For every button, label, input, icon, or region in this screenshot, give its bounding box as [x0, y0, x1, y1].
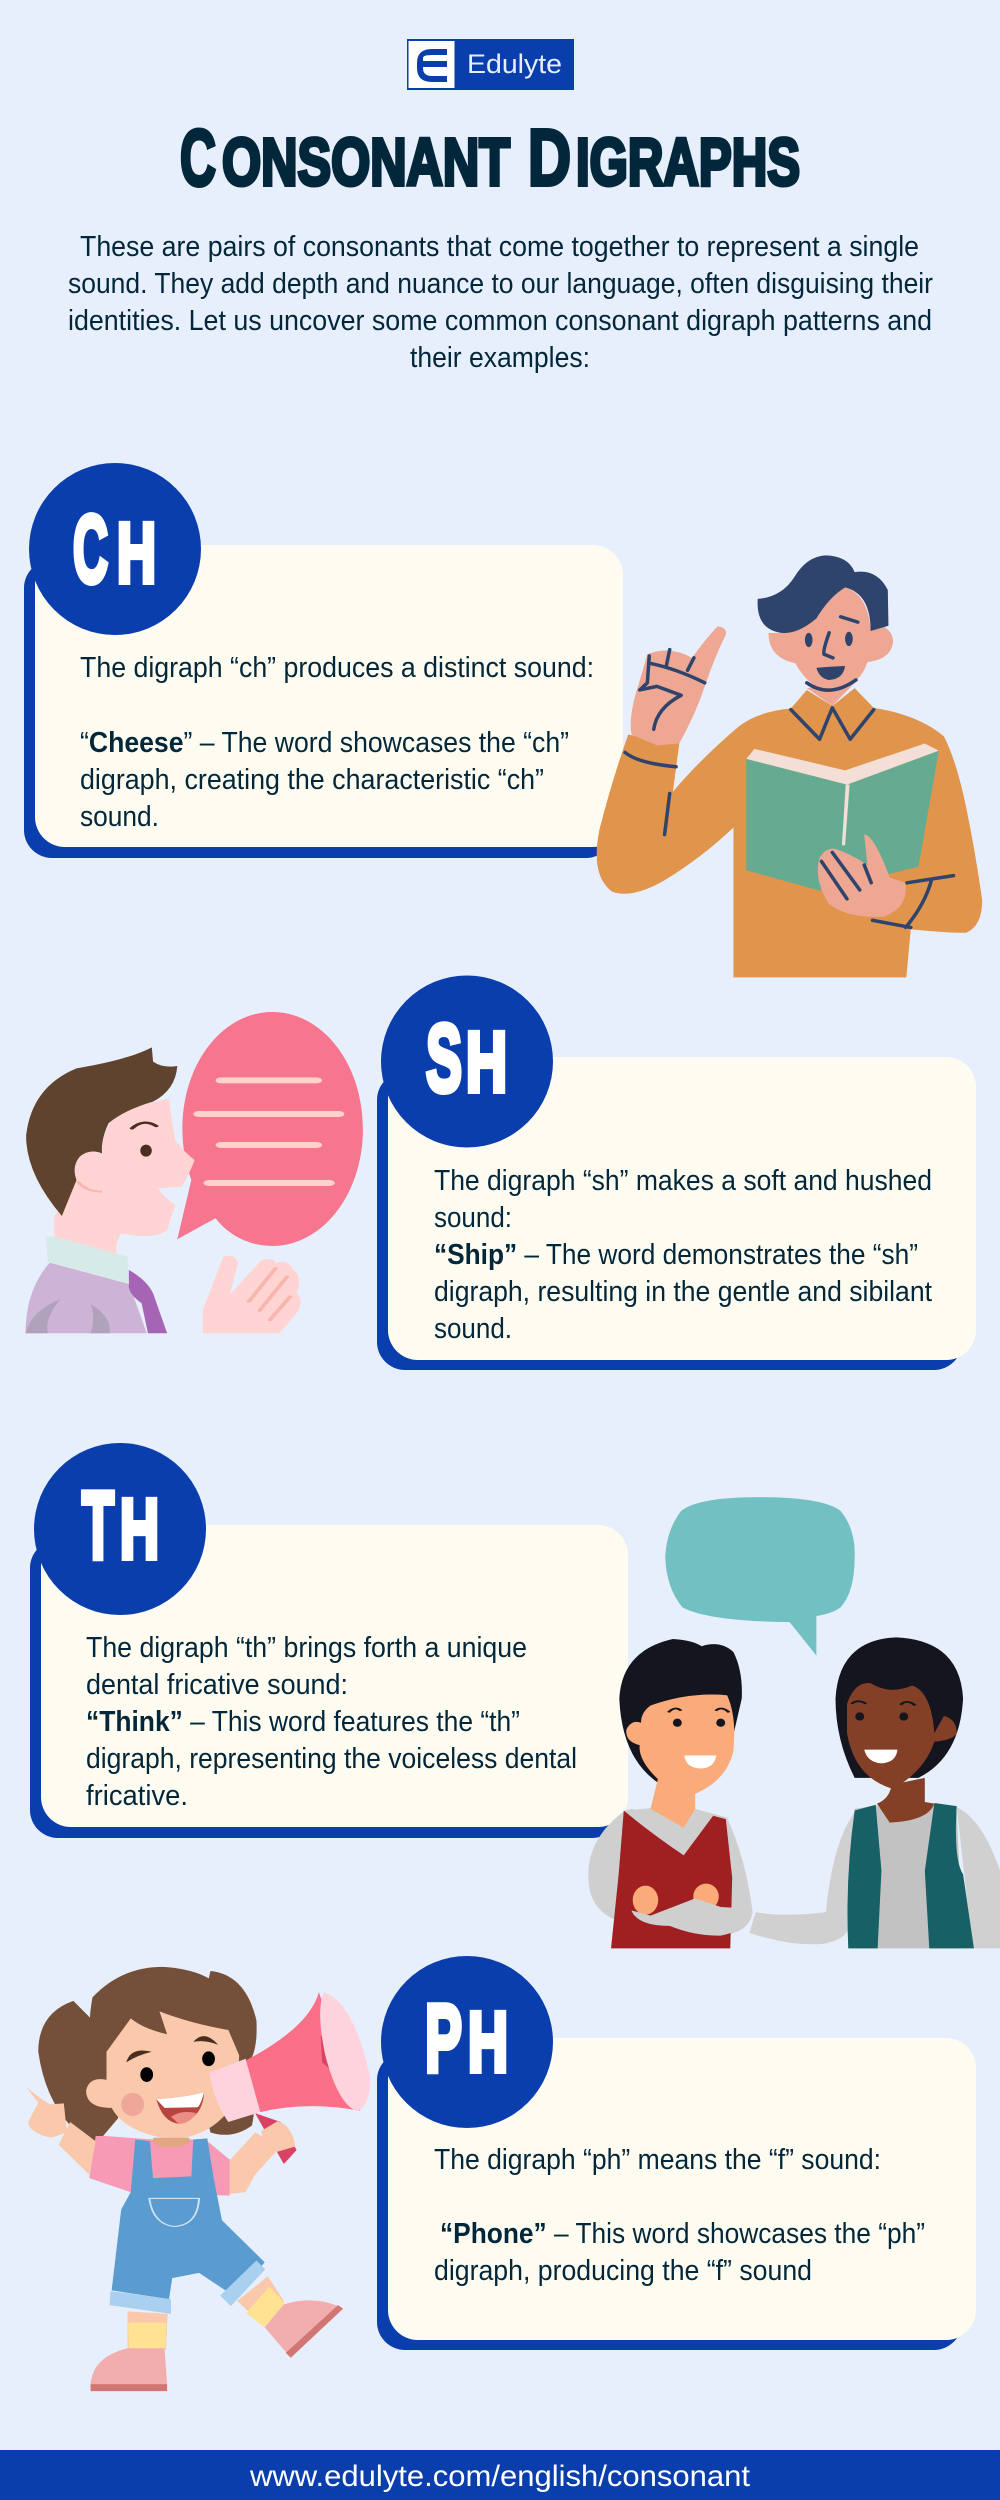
text: CH description: The digraph “ch” produces a distinct sound: — [80, 652, 594, 684]
text: SH description: The digraph “sh” makes a soft and hushed — [434, 1165, 932, 1197]
panel: SH — [377, 976, 976, 1370]
text: SH description: digraph, resulting in the gentle and sibilant — [434, 1276, 932, 1308]
badge: TH — [34, 1443, 206, 1615]
text: CH description — [80, 652, 594, 833]
badge: PH — [381, 1956, 553, 2128]
badge: PH: P — [425, 1985, 462, 2092]
badge: SH: H — [466, 1015, 507, 1109]
illustration: girl with megaphone — [26, 1967, 370, 2391]
title: ONSONANT — [222, 125, 510, 200]
text: TH description: “Think” – This word features the “th” — [86, 1706, 520, 1738]
intro text — [68, 231, 933, 374]
title: IGRAPHS — [576, 125, 800, 200]
title — [180, 113, 800, 202]
intro text: sound. They add depth and nuance to our language, often disguising their — [68, 268, 933, 300]
text: PH description: The digraph “ph” means the “f” sound: — [434, 2144, 881, 2176]
text: TH description: fricative. — [86, 1780, 188, 1812]
text: PH description: digraph, producing the “f” sound — [434, 2255, 812, 2287]
illustration: man speaking with pink speech bubble — [26, 1012, 363, 1333]
text: SH description — [434, 1165, 932, 1345]
badge: CH: H — [117, 506, 156, 600]
badge: PH: H — [468, 1995, 508, 2089]
footer bar: www.edulyte.com/english/consonant — [249, 2460, 751, 2493]
badge: TH: T — [82, 1472, 114, 1579]
footer bar — [0, 2450, 1000, 2500]
badge: TH: H — [120, 1482, 159, 1576]
panel: PH — [377, 1956, 976, 2350]
text: TH description — [86, 1632, 577, 1812]
text: TH description: digraph, representing the voiceless dental — [86, 1743, 577, 1775]
badge: CH — [29, 463, 201, 635]
panel: CH — [24, 463, 623, 858]
intro text: their examples: — [410, 342, 590, 374]
intro text: identities. Let us uncover some common consonant digraph patterns and — [68, 305, 932, 337]
text: TH description: dental fricative sound: — [86, 1669, 348, 1701]
logo: Edulyte: Edulyte — [467, 49, 562, 79]
text: SH description: sound: — [434, 1202, 512, 1234]
intro text: These are pairs of consonants that come together to represent a single — [80, 231, 919, 263]
text: PH description — [434, 2144, 925, 2287]
illustration: teacher with book — [597, 555, 982, 977]
text: SH description: sound. — [434, 1313, 512, 1345]
text: SH description: “Ship” – The word demonstrates the “sh” — [434, 1239, 918, 1271]
illustration: two boys talking with teal speech bubble — [588, 1497, 1000, 1948]
title: C — [180, 113, 216, 202]
badge: SH: S — [426, 1005, 462, 1112]
megaphone — [209, 1992, 370, 2164]
speech bubble — [665, 1497, 855, 1656]
panel: TH — [30, 1443, 628, 1838]
logo: Edulyte — [407, 39, 574, 90]
text: CH description: “Cheese” – The word showcases the “ch” — [80, 727, 569, 759]
title: D — [528, 113, 571, 202]
speech bubble — [177, 1012, 363, 1246]
text: CH description: sound. — [80, 801, 159, 833]
text: TH description: The digraph “th” brings forth a unique — [86, 1632, 527, 1664]
text: CH description: digraph, creating the characteristic “ch” — [80, 764, 544, 796]
text: PH description: “Phone” – This word showcases the “ph” — [440, 2218, 925, 2250]
badge: SH — [381, 976, 553, 1148]
badge: CH: C — [73, 496, 108, 603]
